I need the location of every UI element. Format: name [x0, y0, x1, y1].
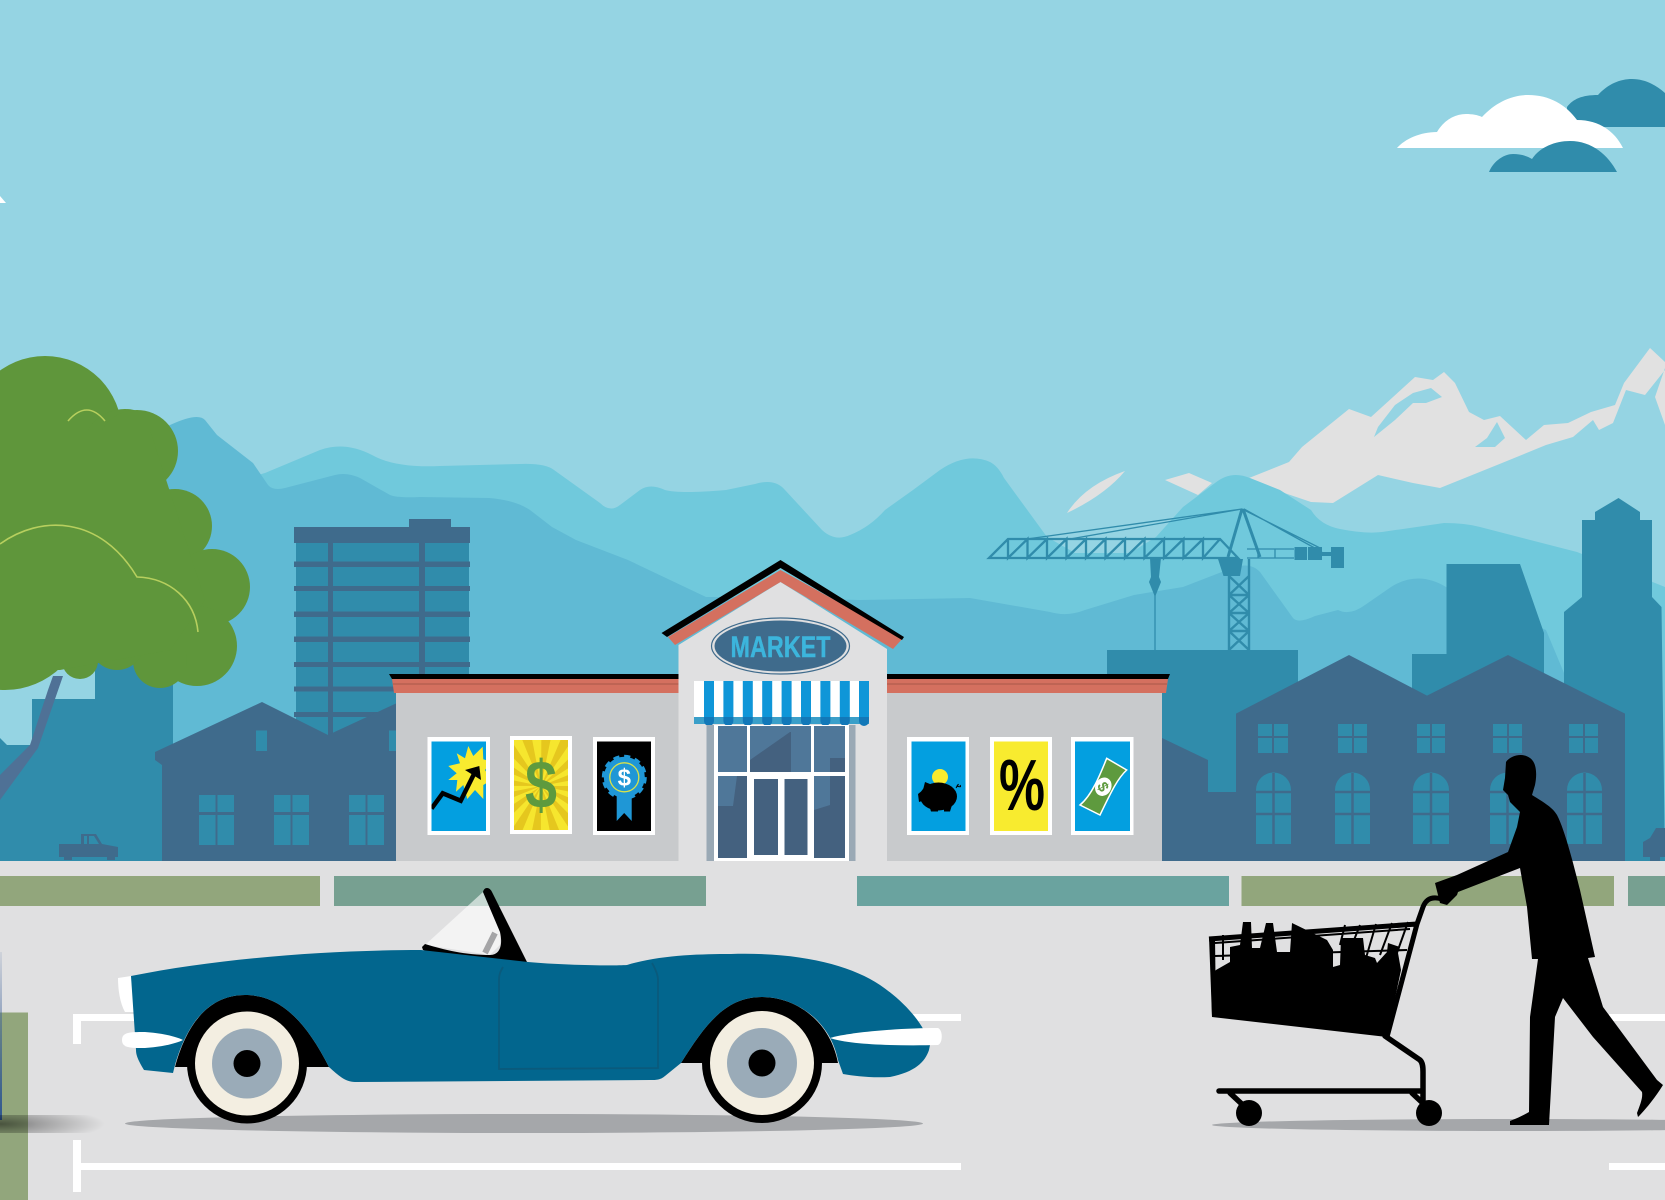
skyline right: teal buildings	[1107, 498, 1665, 861]
right wing	[887, 693, 1162, 861]
poster: percent sign: %	[999, 746, 1045, 826]
gable salmon trim	[668, 570, 903, 649]
construction crane	[989, 509, 1344, 650]
windshield glass	[425, 892, 500, 955]
house row left	[155, 702, 397, 861]
entrance	[706, 725, 856, 861]
tree	[0, 356, 250, 800]
crane jib	[989, 539, 1238, 558]
tree canopy	[0, 356, 250, 690]
ground	[0, 861, 1665, 1200]
distant car right	[1643, 828, 1665, 861]
cart wheels	[1236, 1100, 1262, 1126]
mountain range: mid blue	[240, 446, 1665, 870]
windshield frame	[422, 888, 527, 963]
shopper shadow	[1212, 1119, 1665, 1131]
factory window bars	[1256, 773, 1602, 844]
striped awning	[694, 681, 869, 726]
crane tower	[1229, 559, 1249, 650]
rear fin highlight	[118, 976, 134, 1012]
crane hook	[1149, 558, 1161, 597]
crane counterweights and cab	[1218, 547, 1344, 576]
poster: dollar sign: $	[525, 747, 557, 823]
flat roof black edge	[389, 674, 1170, 679]
sky	[0, 0, 1665, 900]
convertible car	[118, 888, 942, 1124]
sign oval	[712, 618, 850, 674]
poster: award rosette: $	[618, 764, 632, 792]
mountain range: front blue	[130, 417, 1564, 870]
factory windows	[1256, 724, 1602, 844]
tree contour lines	[0, 410, 198, 632]
factory building right	[1162, 655, 1625, 861]
distant pickup truck	[59, 834, 118, 860]
parking lines	[73, 1014, 1665, 1192]
sidewalk step	[706, 861, 857, 876]
windshield wiper	[485, 933, 495, 953]
front bumper	[830, 1028, 942, 1045]
poster: percent sign	[990, 737, 1052, 835]
rear bumper	[122, 1032, 183, 1048]
sign text: MARKET	[730, 631, 830, 664]
glass panes	[718, 726, 845, 858]
snow-capped mountains	[1067, 348, 1665, 513]
house windows	[199, 730, 397, 845]
shopper silhouette	[1435, 755, 1663, 1125]
foreground post left	[0, 952, 105, 1200]
skyline left: teal buildings	[0, 658, 173, 861]
cart rim and handle	[1209, 898, 1442, 1037]
poster: piggy bank	[907, 737, 969, 835]
poster: rising chart	[428, 737, 492, 835]
clouds	[0, 79, 1665, 203]
crane counter jib	[1247, 549, 1294, 558]
cart frame	[1219, 1036, 1427, 1107]
glass reflections	[718, 732, 845, 858]
flat roof salmon fascia	[392, 679, 1168, 693]
poster: dollar bill: $	[1093, 779, 1112, 795]
gable black roof edge	[662, 560, 904, 640]
rear wheel	[187, 1004, 307, 1124]
tree trunk	[0, 676, 63, 800]
poster: award rosette	[593, 737, 655, 835]
angled building	[1412, 564, 1544, 861]
left wing	[396, 693, 679, 861]
cart wires	[1215, 922, 1410, 960]
front wheel	[702, 1003, 822, 1123]
cart contents	[1211, 922, 1401, 1037]
construction base block	[1107, 650, 1298, 861]
poster: dollar sign	[510, 736, 572, 834]
wheel arches	[175, 995, 838, 1067]
door outline	[499, 963, 658, 1069]
tall office building	[294, 519, 470, 745]
spired tower	[1564, 498, 1665, 861]
market building	[389, 560, 1170, 876]
car body	[131, 950, 930, 1082]
car shadow	[125, 1114, 923, 1133]
hedge strips	[0, 876, 1665, 906]
shopping cart	[1209, 898, 1442, 1126]
poster: dollar bill	[1071, 737, 1134, 835]
central gable wall	[678, 582, 887, 861]
crane cables and mast	[1027, 509, 1322, 650]
